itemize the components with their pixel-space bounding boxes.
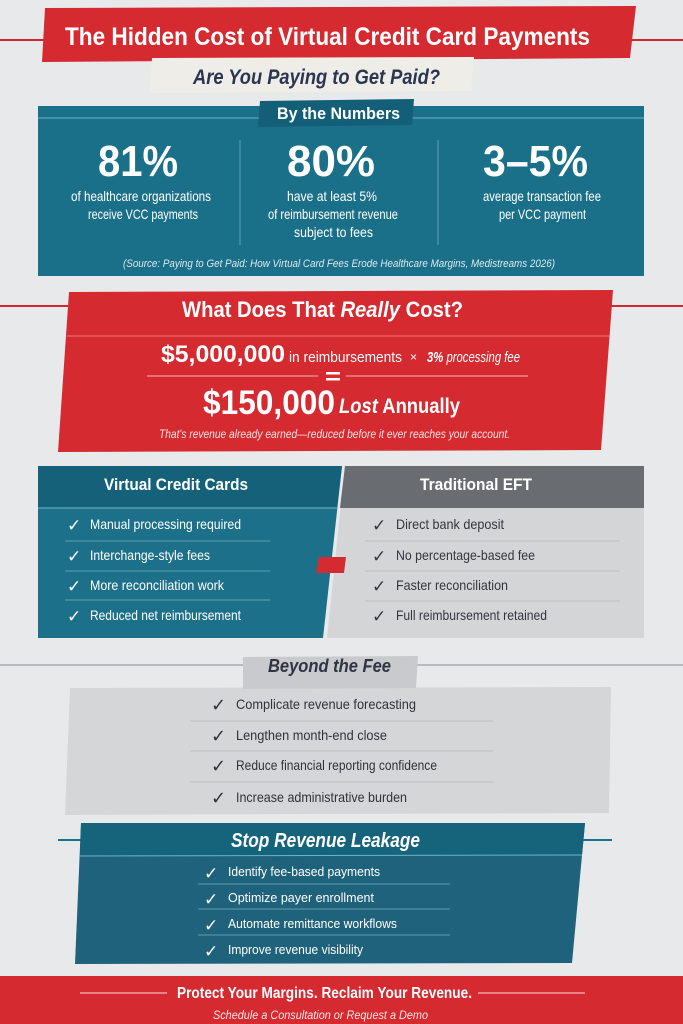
stat: 80%: have at least 5% — [287, 188, 377, 204]
panel: stop revenue leakage: Improve revenue visibility — [228, 942, 363, 957]
stat: 3-5%: 3–5% — [483, 137, 588, 186]
panel: beyond the fee: Reduce financial reporting confidence — [236, 757, 437, 773]
panel: by the numbers — [38, 99, 644, 276]
panel: virtual credit cards: ✓ — [67, 547, 81, 567]
subtitle — [150, 57, 474, 93]
panel: virtual credit cards: ✓ — [67, 516, 81, 536]
panel: stop revenue leakage: ✓ — [204, 942, 218, 962]
stat: 3-5%: average transaction fee — [483, 188, 601, 204]
panel: beyond the fee: ✓ — [211, 788, 226, 809]
calculation — [147, 341, 528, 422]
calculation: $150,000 — [203, 384, 335, 422]
panel: beyond the fee: ✓ — [211, 695, 226, 716]
panel: beyond the fee: Complicate revenue forecasting — [236, 696, 416, 712]
panel: stop revenue leakage: ✓ — [204, 890, 218, 910]
stat: 81%: of healthcare organizations — [71, 188, 211, 204]
stat: 80%: of reimbursement revenue — [268, 206, 398, 222]
panel: traditional EFT: Faster reconciliation — [396, 577, 508, 593]
panel: virtual credit cards: ✓ — [67, 607, 81, 627]
calculation: 3% processing fee — [427, 349, 520, 366]
stat: 3-5%: per VCC payment — [499, 206, 586, 222]
panel: virtual credit cards: More reconciliation work — [90, 577, 225, 593]
panel: beyond the fee: Increase administrative burden — [236, 789, 407, 805]
heading: beyond the fee: Beyond the Fee — [268, 656, 391, 676]
panel: stop revenue leakage: ✓ — [204, 916, 218, 936]
footer: Protect Your Margins. Reclaim Your Revenue. — [177, 985, 472, 1002]
footer: Schedule a Consultation or Request a Demo — [213, 1008, 428, 1022]
heading: by the numbers — [258, 99, 414, 127]
panel: beyond the fee: Lengthen month-end close — [236, 727, 387, 743]
stat: 80%: subject to fees — [294, 224, 373, 240]
panel: traditional EFT: No percentage-based fee — [396, 547, 535, 563]
panel: stop revenue leakage: Optimize payer enrollment — [228, 890, 374, 905]
heading: beyond the fee — [243, 656, 418, 689]
panel: what does that really cost — [58, 290, 613, 452]
callout: revenue note: That's revenue already earned—reduced before it ever reaches your account. — [159, 427, 510, 441]
panel: beyond the fee: ✓ — [211, 756, 226, 777]
calculation: in reimbursements — [289, 349, 402, 366]
panel: stop revenue leakage — [58, 823, 612, 964]
panel: stop revenue leakage: Identify fee-based payments — [228, 864, 380, 879]
panel: virtual credit cards: Interchange-style fees — [90, 547, 210, 563]
icon: red marker — [316, 557, 346, 573]
calculation: $5,000,000 — [161, 341, 285, 368]
calculation: Lost Annually — [339, 395, 460, 418]
panel: beyond the fee: ✓ — [211, 726, 226, 747]
panel: traditional EFT — [327, 466, 644, 638]
panel: stop revenue leakage: Stop Revenue Leakage — [231, 830, 420, 852]
panel: traditional EFT: ✓ — [372, 547, 386, 567]
heading: cost: What Does That Really Cost? — [182, 297, 463, 322]
panel: virtual credit cards: Reduced net reimbursement — [90, 607, 241, 623]
panel: traditional EFT: Traditional EFT — [420, 475, 533, 494]
calculation: × — [410, 350, 417, 364]
heading: by the numbers: By the Numbers — [277, 104, 400, 123]
panel: traditional EFT: ✓ — [372, 607, 386, 627]
panel: stop revenue leakage: Automate remittance workflows — [228, 916, 397, 931]
panel: comparison — [38, 466, 644, 638]
panel: traditional EFT: ✓ — [372, 516, 386, 536]
panel: beyond the fee — [65, 687, 611, 815]
stat: 81%: receive VCC payments — [88, 206, 198, 222]
footer — [0, 976, 683, 1024]
panel: virtual credit cards: Manual processing required — [90, 516, 241, 532]
panel: stop revenue leakage: ✓ — [204, 864, 218, 884]
stat: 80% — [268, 137, 398, 240]
title banner: The Hidden Cost of Virtual Credit Card Payments — [65, 23, 590, 51]
stat: 80%: 80% — [287, 137, 375, 186]
stat: 81% — [71, 137, 211, 222]
panel: traditional EFT: ✓ — [372, 577, 386, 597]
panel: virtual credit cards — [38, 466, 342, 638]
panel: virtual credit cards: ✓ — [67, 577, 81, 597]
stat: 81%: 81% — [98, 137, 178, 186]
panel: traditional EFT: Direct bank deposit — [396, 516, 504, 532]
panel: traditional EFT: Full reimbursement retained — [396, 607, 547, 623]
title banner — [42, 6, 636, 62]
subtitle: Are You Paying to Get Paid? — [192, 66, 440, 89]
panel: virtual credit cards: Virtual Credit Cards — [104, 475, 248, 494]
source note: (Source: Paying to Get Paid: How Virtual Card Fees Erode Healthcare Margins, Medistreams 2026) — [123, 258, 555, 270]
stat: 3-5% — [483, 137, 601, 222]
